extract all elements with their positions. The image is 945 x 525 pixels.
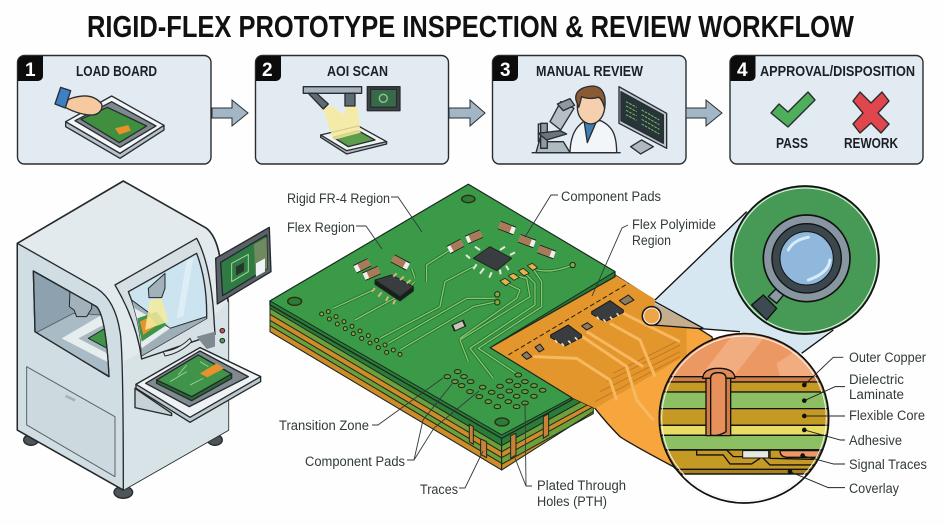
magnifier callout xyxy=(642,186,879,504)
label: dielectric laminate: Laminate xyxy=(849,387,904,402)
panel: step 2 aoi scan xyxy=(256,56,448,164)
label: plated through holes: Holes (PTH) xyxy=(537,494,607,509)
label: coverlay: Coverlay xyxy=(849,481,899,496)
board edge layers xyxy=(270,301,593,470)
main ic xyxy=(466,247,515,278)
arrow: step 3 to 4 xyxy=(686,100,722,126)
flex polyimide tail xyxy=(490,275,733,473)
callout origin circle xyxy=(642,307,661,325)
icon: pass check xyxy=(771,92,815,127)
label: transition zone: Transition Zone xyxy=(279,418,369,433)
step 4 badge xyxy=(730,56,756,81)
label: component pads lower: Component Pads xyxy=(305,454,405,469)
label: adhesive: Adhesive xyxy=(849,433,902,448)
step 1 badge xyxy=(18,56,43,81)
loading tray with board xyxy=(135,348,261,422)
rigid fr-4 board xyxy=(270,184,615,438)
flex chips xyxy=(522,295,634,359)
flex layered stripes xyxy=(595,340,680,402)
icon: hand loading board into tray xyxy=(55,87,164,158)
dark band under window xyxy=(197,332,215,349)
leader lines xyxy=(356,195,628,488)
label: signal traces: Signal Traces xyxy=(849,457,927,472)
arrow: step 1 to 2 xyxy=(212,100,248,126)
rigid-flex board illustration xyxy=(270,301,593,470)
machine front window frame xyxy=(115,238,215,359)
cross-section circle xyxy=(653,330,833,504)
smd capacitors xyxy=(355,225,555,328)
copper pads xyxy=(500,263,538,286)
step 1 heading: LOAD BOARD xyxy=(76,63,157,80)
machine body xyxy=(17,181,228,490)
panel: step 1 load board xyxy=(18,56,211,164)
status lights xyxy=(220,328,225,343)
panel: step 4 approval xyxy=(730,56,923,164)
panel: step 3 manual review xyxy=(492,56,686,164)
flex traces xyxy=(533,313,680,420)
step 4 heading: APPROVAL/DISPOSITION xyxy=(760,63,915,80)
aoi inspection machine xyxy=(17,181,271,498)
label: plated through holes: Plated Through xyxy=(537,478,626,493)
rigid fr-4 top surface xyxy=(270,184,615,438)
green zoom circle with lens xyxy=(731,186,879,334)
board traces xyxy=(333,250,573,378)
label: flex polyimide region: Flex Polyimide xyxy=(632,217,716,232)
rework label: REWORK xyxy=(844,135,898,152)
label: flex region: Flex Region xyxy=(287,220,355,235)
label: dielectric laminate: Dielectric xyxy=(849,372,904,387)
side monitor xyxy=(216,227,271,304)
machine left window xyxy=(33,271,113,378)
machine front window with camera xyxy=(128,253,207,358)
label: component pads top: Component Pads xyxy=(561,189,661,204)
step 4 badge: 4 xyxy=(737,60,748,81)
flex dashed boundary xyxy=(508,283,628,355)
callout cone xyxy=(653,212,833,353)
label: rigid fr-4 region: Rigid FR-4 Region xyxy=(287,191,390,206)
label: flex polyimide region: Region xyxy=(632,233,671,248)
label: flexible core: Flexible Core xyxy=(849,408,925,423)
step 3 badge: 3 xyxy=(500,60,511,81)
icon: technician with microscope and monitor xyxy=(532,86,667,154)
label: outer copper: Outer Copper xyxy=(849,350,926,365)
left ic xyxy=(372,273,413,304)
arrow: step 2 to 3 xyxy=(449,100,485,126)
cross-section leader lines xyxy=(788,357,845,488)
machine handle xyxy=(163,338,192,356)
icon: aoi camera scanning board xyxy=(303,87,400,154)
label: traces: Traces xyxy=(420,482,458,497)
edge pads row xyxy=(320,262,575,356)
step 2 badge xyxy=(256,56,281,81)
step 3 heading: MANUAL REVIEW xyxy=(536,63,644,80)
machine feet xyxy=(24,435,222,498)
step 2 heading: AOI SCAN xyxy=(327,63,388,80)
step 2 badge: 2 xyxy=(262,60,273,81)
mounting holes xyxy=(288,195,509,426)
pass label: PASS xyxy=(776,135,808,152)
via field xyxy=(444,370,546,409)
icon: rework cross xyxy=(853,92,889,133)
step 3 badge xyxy=(493,56,518,81)
step 1 badge: 1 xyxy=(25,60,36,81)
